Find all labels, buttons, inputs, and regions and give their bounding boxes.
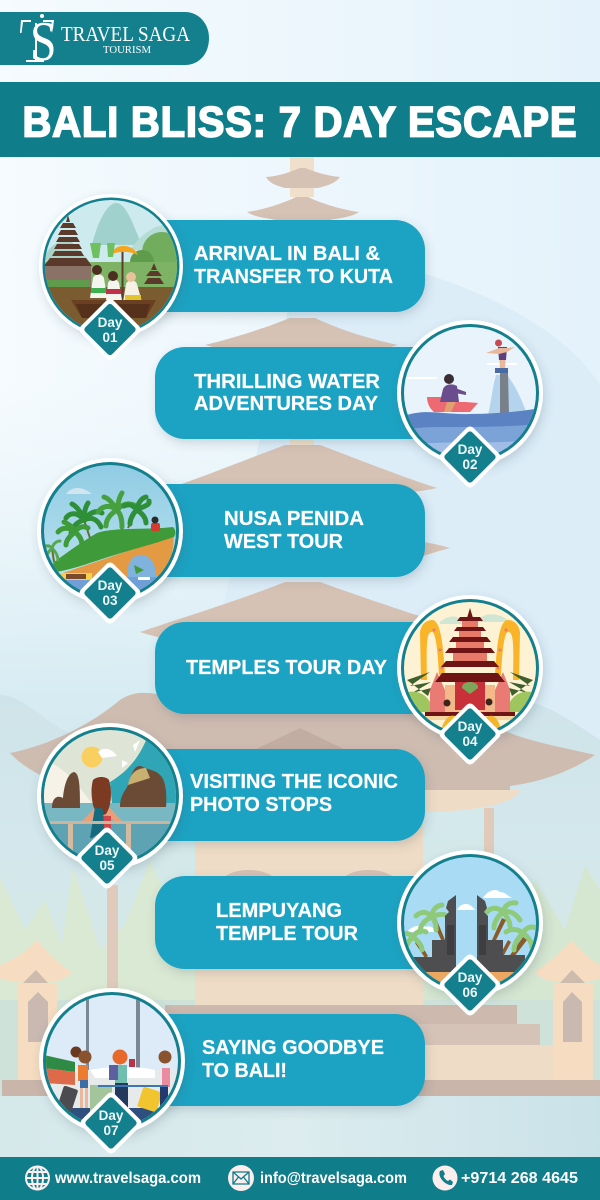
day 3 label bar: NUSA PENIDA: [224, 508, 364, 530]
day 3 illustration: island with palms: [44, 465, 176, 590]
title: BALI BLISS: 7 DAY ESCAPE: [22, 98, 576, 146]
day 6 label bar: [155, 876, 440, 969]
logo pill: [0, 12, 209, 73]
day 5 medallion: [37, 723, 183, 873]
temple pagoda: [0, 157, 600, 1096]
day 2 label bar: ADVENTURES DAY: [194, 393, 379, 415]
day 1 badge: 01: [102, 330, 118, 345]
water: [0, 1096, 600, 1158]
day 7 badge: 07: [103, 1123, 119, 1138]
day 7 label bar: [150, 1014, 425, 1106]
right shrine: [534, 940, 600, 1080]
left shrine: [0, 940, 73, 1080]
day 5 label bar: [150, 749, 425, 841]
day 3 panel: [37, 458, 425, 626]
logo monogram: S: [30, 12, 56, 73]
icon: phone: [432, 1166, 458, 1190]
day 7 badge: [78, 1090, 144, 1156]
day 5 badge: [74, 825, 140, 891]
website: www.travelsaga.com: [54, 1170, 201, 1187]
day 1 badge: [77, 297, 143, 362]
day 4 panel: [155, 595, 543, 767]
day 6 badge: [437, 952, 503, 1018]
day 7 label bar: TO BALI!: [202, 1060, 287, 1082]
day 6 label bar: LEMPUYANG: [216, 900, 342, 922]
day 3 label bar: WEST TOUR: [224, 531, 344, 553]
day 1 illustration: temple and boat: [45, 200, 177, 326]
day 1 label bar: [150, 220, 425, 312]
day 2 medallion: [397, 320, 543, 470]
day 4 label bar: [155, 622, 440, 714]
day 5 panel: [37, 723, 425, 891]
day 3 badge: 03: [102, 593, 118, 608]
day 2 illustration: jet ski and flyboard: [404, 327, 536, 453]
title banner: [0, 82, 600, 157]
logo wordmark: TOURISM: [103, 45, 152, 56]
day 7 illustration: airport travellers: [46, 995, 178, 1120]
day 3 badge: Day: [98, 578, 123, 593]
day 4 badge: 04: [462, 734, 478, 749]
day 6 label bar: TEMPLE TOUR: [216, 923, 359, 945]
day 4 medallion: [397, 595, 543, 741]
day 1 label bar: ARRIVAL IN BALI &: [194, 243, 380, 265]
day 3 label bar: [150, 484, 425, 577]
day 1 medallion: [39, 194, 185, 340]
day 2 label bar: THRILLING WATER: [194, 371, 381, 393]
day 6 medallion: [397, 850, 543, 997]
day 2 label bar: [155, 347, 440, 439]
day 7 panel: [39, 988, 425, 1156]
day 4 label bar: TEMPLES TOUR DAY: [186, 657, 388, 679]
day 2 badge: [437, 424, 503, 490]
day 4 badge: [437, 701, 503, 767]
icon: mail: [228, 1165, 254, 1191]
day 3 medallion: [37, 458, 183, 605]
day 2 panel: [155, 320, 543, 490]
day 2 badge: 02: [462, 457, 478, 472]
day 5 label bar: PHOTO STOPS: [190, 794, 332, 816]
day 4 illustration: temple gate: [404, 602, 536, 728]
day 6 illustration: split gate with palms: [404, 857, 536, 982]
day 4 badge: Day: [458, 719, 483, 734]
day 7 medallion: [39, 988, 185, 1135]
logo wordmark: [61, 22, 191, 56]
logo wordmark: TRAVEL SAGA: [61, 22, 191, 46]
day 1 label bar: TRANSFER TO KUTA: [194, 266, 393, 288]
day 6 badge: 06: [462, 985, 478, 1000]
day 5 badge: Day: [95, 843, 120, 858]
day 3 badge: [77, 560, 143, 626]
day 1 panel: [39, 194, 425, 362]
trees: [0, 860, 195, 1085]
day 7 label bar: SAYING GOODBYE: [202, 1037, 384, 1059]
email: info@travelsaga.com: [260, 1170, 407, 1187]
icon: globe: [26, 1166, 49, 1190]
day 6 panel: [155, 850, 543, 1018]
day 7 badge: Day: [99, 1108, 124, 1123]
phone number: +9714 268 4645: [461, 1170, 578, 1187]
day 1 badge: Day: [98, 315, 123, 330]
day 6 badge: Day: [458, 970, 483, 985]
day 2 badge: Day: [458, 442, 483, 457]
day 5 label bar: VISITING THE ICONIC: [190, 771, 398, 793]
day 5 badge: 05: [99, 858, 115, 873]
day 5 illustration: woman viewing rocks: [44, 730, 176, 856]
footer bar: [0, 1157, 600, 1200]
